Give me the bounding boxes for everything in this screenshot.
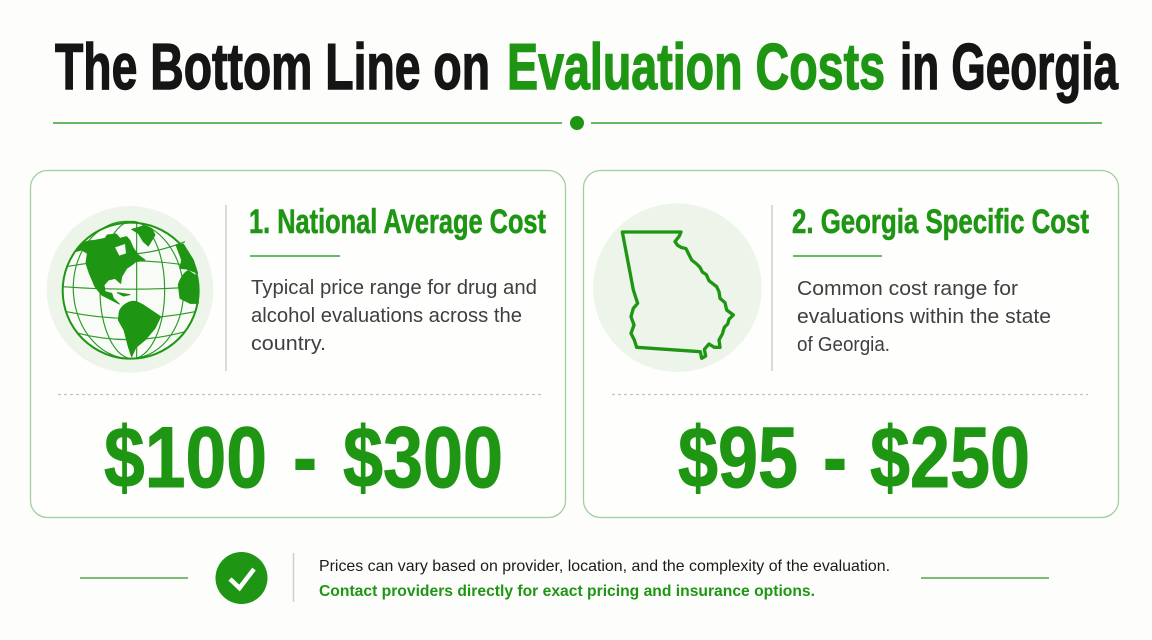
description: Common cost range for <box>797 277 1018 300</box>
price: national: - <box>293 410 317 506</box>
description: of Georgia. <box>797 333 890 356</box>
footer text: Prices can vary based on provider, location, and the complexity of the evaluation. <box>319 558 890 575</box>
price: national <box>104 410 503 506</box>
title divider with dot <box>53 116 1102 130</box>
price: georgia: - <box>823 410 847 506</box>
description: country. <box>251 332 326 355</box>
title <box>55 30 1119 103</box>
description <box>251 276 537 355</box>
footer text: Contact providers directly for exact pricing and insurance options. <box>319 583 815 600</box>
description: evaluations within the state <box>797 305 1051 328</box>
description <box>797 277 1051 356</box>
vertical divider <box>771 205 773 371</box>
vertical divider <box>225 205 227 371</box>
footer text <box>319 558 890 600</box>
icon: globe <box>47 206 213 373</box>
price: national: $100 <box>104 410 267 506</box>
icon: georgia state outline <box>593 203 762 372</box>
icon: check mark <box>216 552 268 604</box>
title: Evaluation Costs <box>507 30 885 103</box>
panel: georgia specific cost <box>584 170 1118 518</box>
price: georgia: $95 <box>678 410 798 506</box>
description: alcohol evaluations across the <box>251 304 522 327</box>
price: georgia: $250 <box>870 410 1030 506</box>
panel: national average cost <box>30 170 566 518</box>
price: georgia <box>678 410 1030 506</box>
footer note <box>80 552 1049 604</box>
price: national: $300 <box>343 410 503 506</box>
title: The Bottom Line on <box>55 30 490 103</box>
heading: 1. National Average Cost <box>249 203 546 241</box>
description: Typical price range for drug and <box>251 276 537 299</box>
